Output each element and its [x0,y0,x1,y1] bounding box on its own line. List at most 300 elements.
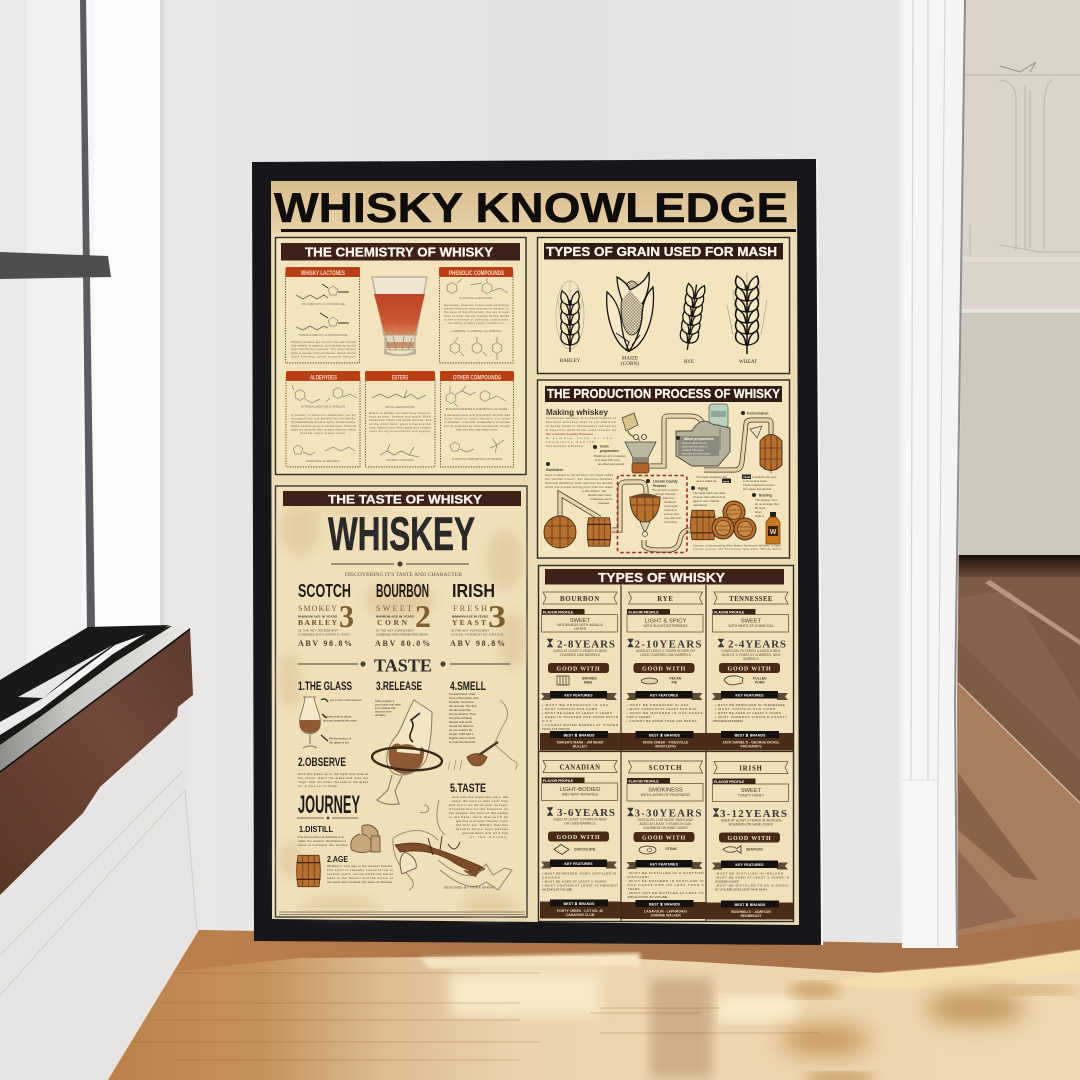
scotch good with [634,832,694,854]
canadian key features: ALCOHOL BY VOLUME [542,888,572,892]
process step labels: which has a lower boiling point than the water [545,485,613,489]
card: whisky lactones: gives a woody, coconut flavour, which can be [291,351,356,355]
bourbon key features: • MUST CONTAIN 51% CORN [542,707,597,711]
card: aldehydes: SYRINGALDEHYDE & VANILLIN [301,404,345,408]
panel: types of whisky [538,566,794,922]
lincoln county process box: Process [653,484,666,488]
card: whisky lactones: CIS-3-METHYL-4-OCTANOLIDE [301,302,345,306]
heading: production: THE PRODUCTION PROCESS OF WHISKY [547,387,781,401]
step: smell with nose illustration: to nose the flavours. [449,740,476,744]
scotch years: DISTILLED 2 OR MORE TIMES AND [638,818,693,822]
icon: mash tank and water jug [676,404,730,466]
card: other compounds: B-DAMASCENONE & PHENETHYL ALCOHOL [446,407,508,411]
card: other compounds: fruity, floral or honey flavours in a range [444,417,510,421]
process step labels: Distillation [546,468,563,472]
process step labels: 80 proof [755,506,765,510]
tennessee years: CHARCOAL FILTERED & AGED A MINI- [721,649,781,653]
rye flavor: FLAVOR PROFILE [628,610,659,614]
tennessee flavor: FLAVOR PROFILE [714,610,745,614]
tennessee name [714,592,788,604]
scotch key features: ·MUST NOT BE BOTTLED AT LESS TO [628,891,704,895]
canadian best brands: BEST ♜ BRANDS [564,902,595,906]
scotch years: 3-30YEARS [634,808,702,820]
rye flavor: LIGHT & SPICY [645,618,686,624]
column: irish: MINIMUM AGE IN YEARS [452,614,488,618]
tennessee best brands: JACK DANIEL'S · GEORGE DICKEL [722,740,780,744]
step: release with glass illustration: aroma in the [375,710,392,714]
step: the glass: Narrow neck to direct [323,714,352,718]
step: smell with nose illustration: bring the whiskey [449,716,473,720]
step: the glass: aromas towards the nose [323,718,357,722]
process step labels: wort [722,479,729,483]
process step labels: aged in new, charred [693,499,719,503]
rye key features: KEY FEATURES [650,694,679,698]
icon: maize [607,272,653,351]
tennessee flavor [712,609,788,632]
irish best brands [721,900,779,918]
lincoln county process box: through charcoal [655,492,675,496]
irish best brands: BEST ♜ BRANDS [735,903,766,907]
rye name: RYE [657,596,674,603]
text: making whiskey: Making whiskey [546,407,608,417]
card: other compounds: FURFURYL MERCAPTAN & PYRAZINE [452,457,502,461]
step: smell with nose illustration: 4.SMELL [450,679,486,693]
step: smell with nose illustration [448,679,517,770]
rye key features: • CANNOT BE MORE THAN 160 PROOF [626,719,697,723]
irish key features: ·MUST BE AGED AT LEAST 3 YEARS IN [715,876,789,880]
step: smell with nose illustration: nose of the glass, and [449,696,479,700]
card: canadian [540,760,621,918]
process step labels: Grain [600,444,609,448]
card: esters: Esters in whisky can add fruity flavours, [369,411,431,415]
irish best brands: BUSHMILLS · JAMESON [731,910,771,914]
tennessee good with [719,663,780,685]
whiskey headline [328,507,475,578]
card: whisky lactones: that whisky is aged in, and picked up by the [291,344,356,348]
tennessee flavor: WITH HINTS OF CHARCOAL [728,624,774,628]
canadian best brands [550,900,608,917]
scotch key features: KEY FEATURES [650,862,679,866]
scotch key features: DISTILLERY [628,875,650,879]
card: aldehydes: Syringaldehyde lends a spicy, smoky aroma, [291,420,356,424]
step: taste with mouth illustration: of the whisky. [470,835,508,839]
card: phenolic compounds: fires to heat the dry malted barley works [444,314,510,318]
step: observe: the colour. Swirl the glass and note the [298,776,368,780]
icon: bottle [766,512,780,544]
heading: journey: JOURNEY [298,791,360,819]
canadian best brands: CANADIAN CLUB [566,913,595,917]
rye years: AGED AT LEAST 2 YEARS IN NEW OR [636,649,695,653]
rye key features: • MUST BE MATURED IN OAK CASKS [626,711,702,715]
card: aldehydes: ALDEHYDES [310,374,337,381]
scotch key features: ·MUST BE DISTILLED AT A SCOTTISH [628,871,704,875]
process step labels: oak barrels. [693,503,708,507]
icon: bottle: W [770,529,777,536]
canadian key features: KEY FEATURES [564,862,593,866]
bourbon years: CHARRED OAK BARRELS [560,653,601,657]
heading: taste ornament [298,656,510,676]
process step labels: Fermentation [747,412,768,416]
tennessee years: MUM OF 2 YEARS IN CHARRED, NEW [721,653,781,657]
column: scotch: IS THE KEY INGREDIENT [298,628,338,632]
tennessee key features: PROCESS FILTERING [713,719,744,723]
rye years [628,638,702,657]
step: taste with mouth illustration: the tongue: the front of the palate [449,811,508,815]
column: scotch: SCOTCH [298,581,351,601]
irish flavor: TOASTY HONEY [738,794,765,798]
card: whisky lactones: TRANS-3-METHYL-4-OCTANOLIDE [299,333,347,337]
lincoln county process box: wood sugar [664,504,678,508]
process step labels: fractional distillation: heat vaporizes the alcohol, [545,481,613,485]
canadian key features: • MUST BE MASHED, AGED, DISTILLED IN [542,872,616,876]
rye name [628,592,702,604]
icon: grain sack and hopper [622,413,656,473]
step: taste with mouth illustration: getting a proper flavour from [456,819,508,823]
tennessee best brands: BEST ♜ BRANDS [735,733,766,737]
tennessee key features: • MUST BE PRODUCED IN TENNESSEE [715,703,785,707]
tennessee years: 2-4YEARS [728,638,786,650]
scotch name [628,761,702,773]
step: release with glass illustration [371,679,443,804]
lincoln county process box: 3 to 5 days [664,520,678,524]
scotch good with: STEAK [666,847,678,851]
card: aldehydes: adds an almond-like, grainy flavour, while [291,427,356,431]
scotch name: SCOTCH [649,765,682,772]
canadian years: OR USED BARRELS [564,822,596,826]
irish years [713,808,787,826]
process step labels: stronger than 125 proof is [693,495,725,499]
lincoln county process box [618,476,687,552]
card: esters [365,371,435,467]
card: other compounds [440,371,514,467]
process step labels: in fermenting tanks. [743,479,768,483]
card: esters: on the other hand, gives a banana-like [369,422,431,426]
lincoln county process box: maple in a [664,508,677,512]
canadian good with: GOOD WITH [557,835,600,841]
scotch key features [626,860,704,899]
process step labels: condenses, and is [590,497,613,501]
irish name [714,762,788,774]
column: irish: IS THE KEY INGREDIENT [451,628,489,632]
text: making whiskey: Tennessee whiskey is a classification of [546,416,616,420]
step: smell with nose illustration: longer. Sniff with a [449,732,474,736]
canadian good with: CHOCOLATE [574,848,596,852]
step: distill [298,824,380,852]
step: age with barrel: The spirit is casually stored for up to [327,868,393,872]
step: smell with nose illustration: as you smell it for [449,728,472,732]
heading: types: TYPES OF WHISKY [598,571,726,585]
card: whisky lactones: WHISKY LACTONES [301,270,345,277]
heading: chemistry: THE CHEMISTRY OF WHISKY [305,244,493,260]
heading: taste: THE TASTE OF WHISKY [328,492,482,506]
column: irish: IRISH [452,581,495,601]
bourbon key features: • CANNOT ENTER BARREL AT HIGHER [542,723,619,727]
rye key features: • MUST BE PRODUCED IN USA [626,703,689,707]
whiskey headline: WHISKEY [328,507,475,560]
card: esters: such as pear, banana and apple. Ethyl [369,415,431,419]
process step labels: the "distiller's beer". For chemistry-fanatics, [545,477,613,481]
lincoln county process box: The alcohol is poured [652,488,678,492]
process step labels [545,411,782,551]
heading: types [545,569,784,585]
irish best brands: REDBREAST [740,914,762,918]
process step labels: bottled [755,514,764,518]
tennessee key features: • MUST BE AGED AT LEAST 2 YEARS [715,711,781,715]
tennessee good with: PULLED [753,676,767,680]
step: distill: used to increase the alcohol [298,843,348,847]
floor light and knots [450,972,1080,1080]
icon: mash tank and water jug: Grain is added to the [682,441,707,445]
lincoln county process box: hardwood [664,500,676,504]
irish key features: KEY FEATURES [735,863,764,867]
scotch flavor: WITH LAYERS OF FRUITINESS [641,793,691,797]
wainscot panel [0,700,198,1080]
icon: fermentation tank [750,426,782,473]
rye key features [626,691,702,723]
card: esters: hexanoate offers red apple aromas, and [369,418,431,422]
process step labels: Bottling [759,494,772,498]
step: age with barrel: adds to the flavour and the colour of [327,876,393,880]
step: release with glass illustration: it to release the [375,706,396,710]
step: taste with mouth illustration: 5.TASTE [450,781,486,795]
lincoln county process box: process that [664,512,679,516]
canadian flavor: AND VERY VERSATILE [562,792,599,796]
text: making whiskey: a specific additional step known as [546,428,617,432]
whiskey headline: DISCOVERING IT'S TASTE AND CHARACTER [345,572,463,578]
tennessee key features: • MUST CONTAIN 51% CORN [715,707,775,711]
bourbon flavor: SWEET [570,618,591,624]
process step labels: alcohol vapor rises, [588,493,612,497]
bourbon years [547,638,615,657]
column: irish: ABV 98.8% [450,639,505,648]
step: taste with mouth illustration: the first sip. Whisky that has [456,823,508,827]
scotch flavor: SMOKINESS [648,788,683,794]
irish name: IRISH [739,766,763,772]
process step labels: collected [598,501,609,505]
card: tennessee [706,592,793,750]
step: taste with mouth illustration: ground down and let a hint [462,831,508,835]
card: rye [622,592,706,750]
card: bourbon [540,592,621,750]
column: irish: FRESH [453,604,487,613]
card: other compounds: OTHER COMPOUNDS [453,374,502,381]
icon: whisky glass [372,277,427,356]
lincoln county process box: Lincoln County [653,480,678,484]
tennessee good with: PORK [755,680,765,684]
grain labels: MAIZE [622,356,638,362]
rye flavor: WITH SLIGHT BITTERNESS [643,624,688,628]
card: whisky lactones: Whisky lactones are found in the oak barrels [291,340,357,344]
bourbon flavor [542,609,618,632]
card: phenolic compounds: GUAIACOL & EUGENOL [459,296,493,300]
step: smell with nose illustration: reveal the flavours [449,724,474,728]
icon: mash tank and water jug: Mash preparation [684,437,714,441]
column: scotch: COMBINED WITH WATER & YEAST [298,632,350,636]
text: making whiskey: chemistry behind [546,440,594,444]
column: scotch: MINIMUM AGE IN YEARS [298,614,337,618]
irish flavor: SWEET [741,788,762,794]
bourbon name [543,592,617,604]
column: scotch: BARLEY [298,618,338,627]
step: observe: Hold the glass up to the light and look at [298,772,368,776]
bourbon key features [541,691,619,731]
column: irish: 3 [488,598,506,634]
step: taste with mouth illustration: And now the important part: the [452,795,508,799]
panel: types of grain used for mash [538,238,790,374]
column: bourbon [375,581,431,648]
column: irish: ADDED FERMENTED GRAINS [451,632,503,636]
bourbon best brands: MAKER'S MARK · JIM BEAM [557,740,603,744]
canadian best brands: FORTY CREEK · LOT NO. 40 [557,909,603,913]
heading: grain: TYPES OF GRAIN USED FOR MASH [546,244,777,259]
poster paper [271,181,799,925]
rye key features: • MUST CONTAIN AT LEAST 51% RYE [626,707,696,711]
step: smell with nose illustration: the aromas. The first [449,704,477,708]
process step labels: Yeast [743,475,750,479]
process step labels: Lincoln County; 117 Tennessee Tech Code; Whisky World [693,548,782,551]
irish years: AGED AT LEAST 3 YEARS IN WOODEN [721,818,782,822]
bourbon flavor: FLAVOR PROFILE [543,610,574,614]
canadian years [547,807,615,826]
lincoln county process box: may take from [664,516,682,520]
column: bourbon: COMBINED WITH FERMENTED GRAIN [376,632,428,636]
rye best brands: WHISTLEPIG [655,744,676,748]
card: phenolic compounds: o-CRESOL, m-CRESOL & p-CRESOL [450,329,502,333]
canadian years: 3-6YEARS [557,807,615,819]
text: making whiskey: the Lincoln County Process. [546,432,594,436]
bourbon best brands: BULLEIT [573,744,588,748]
heading: taste ornament: TASTE [374,656,432,676]
column: irish: YEAST [452,618,486,627]
canadian key features: CANADA [542,876,561,880]
card: phenolic compounds: Generally, phenolic compounds contribute [444,303,509,307]
card: aldehydes [286,371,360,467]
card: aldehydes: FURFURAL & HEXANAL [306,459,340,463]
icon: barley [556,280,584,352]
step: smell with nose illustration: Concentrated, what [449,692,475,696]
floor grain [130,973,820,1060]
card: other compounds: of whiskies. In Scotch, butanedione or acetoin [444,420,510,424]
rye good with: GOOD WITH [642,666,686,672]
scotch years: AGED AT LEAST 3 YEARS IN OAK [639,822,692,826]
bourbon good with: RIBS [584,680,593,684]
process step labels: be no stronger than [755,502,780,506]
irish good with: SEAFOOD [746,848,763,852]
step: age with barrel: 2.AGE [327,854,348,864]
scotch key features: OAK CASKS FOR NO LESS THAN 3 [628,883,704,887]
bourbon good with: SMOKED [582,676,597,680]
step: distill: make the alcohol. Distillation is [298,839,347,843]
card: phenolic compounds: PHENOLIC COMPOUNDS [449,270,505,277]
column: bourbon: SWEET [376,604,412,613]
card: whisky lactones [286,267,360,363]
heading: taste [283,491,521,506]
irish key features: WOODEN CASKS [715,880,739,884]
card: phenolic compounds: the case of Scotch whisky, the use of peat [444,310,509,314]
step: taste with mouth illustration: alcohol burns best passes [456,827,508,831]
irish good with [719,832,780,854]
icon: distillation still and barrel [544,516,611,548]
window with frame [0,0,164,690]
step: smell with nose illustration: deeper and you'll [449,720,472,724]
step: age with barrel: the spirit and mellows the taste of whiskey. [327,880,393,884]
text: making whiskey: to being made in Tennessee) refined by [546,424,617,428]
step: age with barrel: Whiskey's only age in the wooden barrels. [327,864,393,868]
process step labels: in this solution. The [582,489,606,493]
canadian years: AGED AT LEAST 3 YEARS IN NEW [554,818,607,822]
card: whisky lactones: more fleeting, spicy coconut flavour. [291,354,356,358]
step: smell with nose illustration: strong alcohol. Then [449,712,476,716]
card: aldehydes: A number of different aldehydes can be [291,413,356,417]
icon: aging barrels [690,501,756,540]
step: the glass: Fill the bottom of [329,736,351,740]
card: aldehydes: whilst vanillin gives a vanilla note. Furfural [291,424,356,428]
card: aldehydes: hexanal offers grassy notes. [300,431,346,435]
bourbon good with [548,663,609,685]
step: observe: 2.OBSERVE [298,755,346,769]
step: release with glass illustration: Take a glass & [375,699,395,703]
bourbon key features: OAK [542,719,553,723]
rye key features: FOR 2 YEARS [626,715,650,719]
bourbon years: 2-8YEARS [557,638,615,650]
scotch best brands: BEST ♜ BRANDS [649,902,681,906]
column: bourbon: ABV 80.0% [375,639,430,648]
canadian name: CANADIAN [559,764,601,772]
irish key features: ·MUST BE DISTILLED TO AN ALCOHOL [715,884,789,888]
bourbon good with: GOOD WITH [557,666,600,672]
scotch best brands: JOHNNIE WALKER [650,914,681,918]
process step labels: Distilling's only consisting [594,454,626,458]
card: other compounds: A damascenone and phenethyl alcohol add [444,413,510,417]
canadian flavor [542,778,618,800]
text: making whiskey: A simple look at the [546,436,612,440]
rye best brands: KNOB CREEK · PIKESVILLE [643,740,689,744]
poster frame [252,159,823,945]
grain labels: RYE [684,359,694,365]
process step labels: Heat is added to the alcohol-rich liquid called [545,473,613,477]
column: bourbon: 2 [415,598,431,634]
canadian name [543,760,617,772]
scotch best brands [636,900,694,918]
irish key features: ·MUST BE DISTILLED IN IRELAND [715,872,784,876]
step: observe: for a clue to its body. [298,784,338,788]
grain labels [560,356,758,367]
process step labels: is added to the wort [752,475,777,479]
tennessee key features: KEY FEATURES [735,694,764,698]
process step labels: of at least 51% corn [595,458,620,462]
card: esters: ESTERS [392,374,408,381]
tennessee good with: GOOD WITH [728,666,771,672]
canadian key features [541,860,618,892]
tennessee key features: • MUST UNDERGO LINCOLN COUNTY [715,715,787,719]
text: making whiskey [546,407,617,448]
card: esters: note. Esters form when acids and ethanol [369,425,431,429]
bourbon key features: THAN 125 PROOF [542,727,570,731]
rye flavor [627,609,703,632]
irish key features: BY VOLUME LEVEL LESS THAN 94.8% [715,888,767,892]
rye best brands: BEST ♜ BRANDS [649,733,681,737]
card: esters: ISOAMYL ACETATE [386,458,414,462]
canadian flavor: LIGHT-BODIED [560,787,600,793]
canadian key features: • MUST CONTAIN AT LEAST 40 PERCENT [542,884,618,888]
step: release with glass illustration: 3.RELEASE [376,679,422,693]
column: irish [450,581,506,648]
grain labels: WHEAT [739,359,758,365]
scotch key features: YEARS [628,887,640,891]
rye good with [634,663,694,684]
column: bourbon: CORN [377,618,408,627]
step: the glass [298,679,362,748]
